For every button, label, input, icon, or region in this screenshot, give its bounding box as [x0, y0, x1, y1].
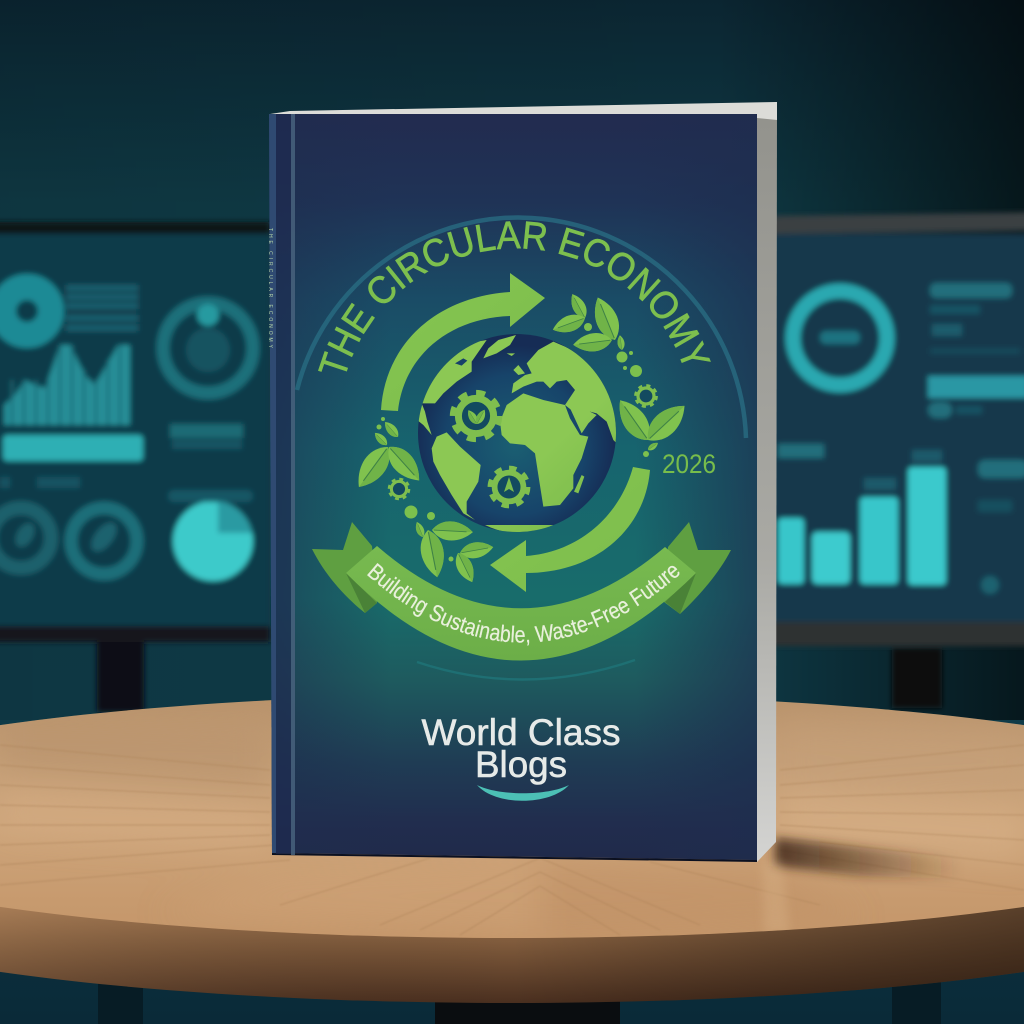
book: [267, 102, 777, 862]
leaves: right sprout: [611, 394, 692, 457]
gear with leaves: [453, 393, 499, 439]
right blurred dashboard monitor: [770, 212, 1024, 708]
table column: [435, 990, 620, 1024]
spine text: THE CIRCULAR ECONOMY: [267, 228, 273, 349]
table rim: [0, 816, 1024, 1003]
decorative arc ring: [297, 218, 746, 438]
table surface: [0, 694, 1024, 938]
gear: small left: [389, 479, 409, 499]
book spine groove: [269, 114, 295, 855]
globe: [415, 334, 618, 533]
publisher swoosh: [477, 785, 569, 801]
continents: [415, 335, 618, 533]
ribbon tails: [312, 522, 731, 614]
publisher name: [422, 712, 620, 785]
gear with arrow: [490, 468, 528, 506]
year label: 2026: [662, 449, 716, 479]
publisher name: Blogs: [475, 744, 567, 785]
title: curved: THE CIRCULAR ECONOMY: [318, 221, 711, 372]
leaves: left cluster: [350, 417, 427, 494]
book cover: [269, 114, 757, 862]
faint arc under ribbon: [417, 660, 635, 680]
ribbon banner: [312, 522, 731, 660]
publisher name: World Class: [422, 712, 620, 753]
ribbon band: [346, 546, 696, 660]
book shadow on table: [775, 838, 1000, 880]
gear: small right: [635, 385, 657, 407]
arrow: lower circular: [490, 467, 650, 592]
book reflection: [764, 860, 786, 931]
book page block: [270, 102, 777, 862]
leaves: bottom cluster: [404, 506, 495, 585]
arrow: upper circular: [381, 273, 545, 411]
ribbon subtitle: Building Sustainable, Waste-Free Future: [367, 563, 680, 646]
leaves: top right cluster: [550, 291, 642, 377]
round wooden table: [0, 694, 1024, 1024]
left blurred dashboard monitor: [0, 222, 270, 712]
stand shadows below the table: [98, 965, 941, 1024]
wood grain: [0, 750, 1024, 920]
